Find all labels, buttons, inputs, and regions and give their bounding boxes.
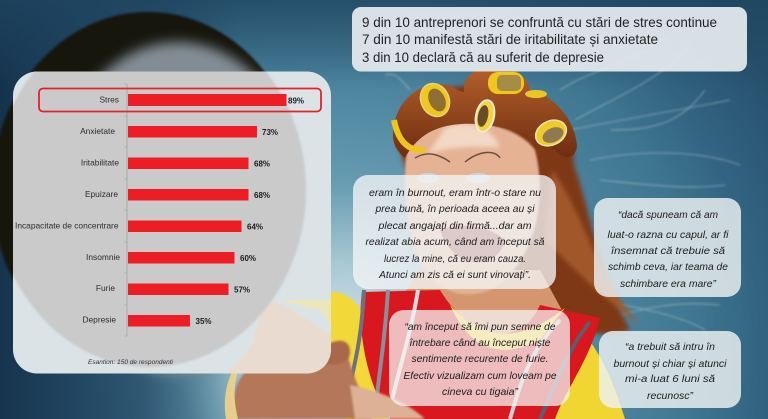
quote: six months to admit: recunosc”	[647, 391, 694, 402]
bar: Incapacitate de concentrare	[15, 220, 263, 232]
flying hair strands	[385, 35, 740, 330]
text: stat line 3: 3 din 10 declară că au suferit de depresie	[362, 50, 604, 65]
bar: Iritabilitate: 68%	[254, 160, 270, 168]
hair back	[398, 85, 630, 334]
frying pan	[0, 12, 304, 368]
bar: Furie: 57%	[234, 286, 250, 294]
bar: Incapacitate de concentrare: Incapacitate de concentrare	[15, 220, 119, 230]
bar: Anxietate	[80, 126, 278, 138]
quote: burnout	[353, 175, 556, 289]
quote: burnout: Atunci am zis că ei sunt vinovați”.	[378, 270, 531, 281]
bar: Depresie	[82, 314, 212, 326]
bar: Epuizare: Epuizare	[85, 189, 118, 199]
quote: fear of change: însemnat că trebuie să	[611, 246, 725, 257]
quote: fear of change	[594, 198, 741, 297]
curlers	[394, 72, 571, 151]
quote: fear of change: schimbare era mare”	[620, 279, 717, 290]
bar: Epuizare	[85, 189, 270, 200]
hair front with rollers	[393, 68, 577, 158]
bar: Incapacitate de concentrare: 64%	[247, 222, 263, 232]
bar: Iritabilitate: Iritabilitate	[81, 158, 119, 168]
chart axis	[124, 84, 127, 336]
bar: Stres	[99, 94, 304, 106]
bar: Epuizare: 68%	[254, 191, 270, 200]
quote: recurring anger: “am început să îmi pun semne de	[404, 322, 556, 333]
quote: fear of change: “dacă spuneam că am	[618, 210, 718, 221]
quote: burnout: plecat angajați din firmă...dar am	[377, 221, 532, 232]
quote: six months to admit: burnout și chiar și atunci	[614, 359, 727, 370]
quote: fear of change: schimb ceva, iar teama de	[608, 262, 728, 273]
frosted panel backing	[13, 72, 331, 374]
quote: burnout: lucrez la mine, că eu eram cauza.	[384, 254, 526, 265]
shirt yellow	[322, 292, 392, 419]
bar: Insomnie	[86, 252, 256, 264]
bar: Insomnie: Insomnie	[86, 252, 120, 262]
hand and handle	[232, 345, 372, 419]
quote: six months to admit	[599, 331, 741, 408]
quote: burnout: realizat abia acum, când am început să	[366, 237, 545, 248]
highlight: Stres row	[39, 88, 321, 112]
bar: Furie	[96, 283, 250, 295]
quote: fear of change: luat-o razna cu capul, ar fi	[608, 230, 729, 241]
bar: Stres: 89%	[288, 96, 304, 106]
quote: recurring anger: Efectiv vizualizam cum loveam pe	[404, 371, 557, 382]
quote: burnout: prea bună, în perioada aceea au și	[375, 204, 535, 215]
panel: top statistics	[352, 7, 747, 72]
bar: Iritabilitate	[81, 158, 270, 169]
quote: burnout: eram în burnout, eram într-o stare nu	[369, 188, 541, 199]
face	[405, 121, 540, 294]
quote: recurring anger	[389, 310, 570, 406]
quote: six months to admit: mi-a luat 6 luni să	[625, 374, 715, 385]
bar: Depresie: 35%	[196, 317, 212, 326]
panel: bar chart	[13, 72, 331, 374]
bar: Stres: Stres	[99, 94, 119, 104]
text: stat line 2: 7 din 10 manifestă stări de iritabilitate și anxietate	[362, 32, 658, 47]
quote: recurring anger: întrebare când au început niște	[410, 338, 551, 349]
quote: recurring anger: sentimente recurente de furie.	[412, 354, 548, 365]
bar: Insomnie: 60%	[240, 254, 256, 263]
bar: Depresie: Depresie	[82, 314, 116, 324]
bar: Anxietate: Anxietate	[80, 126, 115, 136]
text: stat line 1: 9 din 10 antreprenori se confruntă cu stări de stres continue	[362, 15, 717, 30]
quote: six months to admit: “a trebuit să intru în	[625, 342, 715, 353]
bar: Furie: Furie	[96, 283, 115, 293]
bar: Anxietate: 73%	[262, 128, 278, 137]
text: sample note: Esantion: 150 de respondenti	[88, 359, 174, 366]
quote: recurring anger: cineva cu tigaia”	[442, 387, 519, 398]
neck	[400, 270, 570, 336]
red apron	[361, 290, 600, 419]
